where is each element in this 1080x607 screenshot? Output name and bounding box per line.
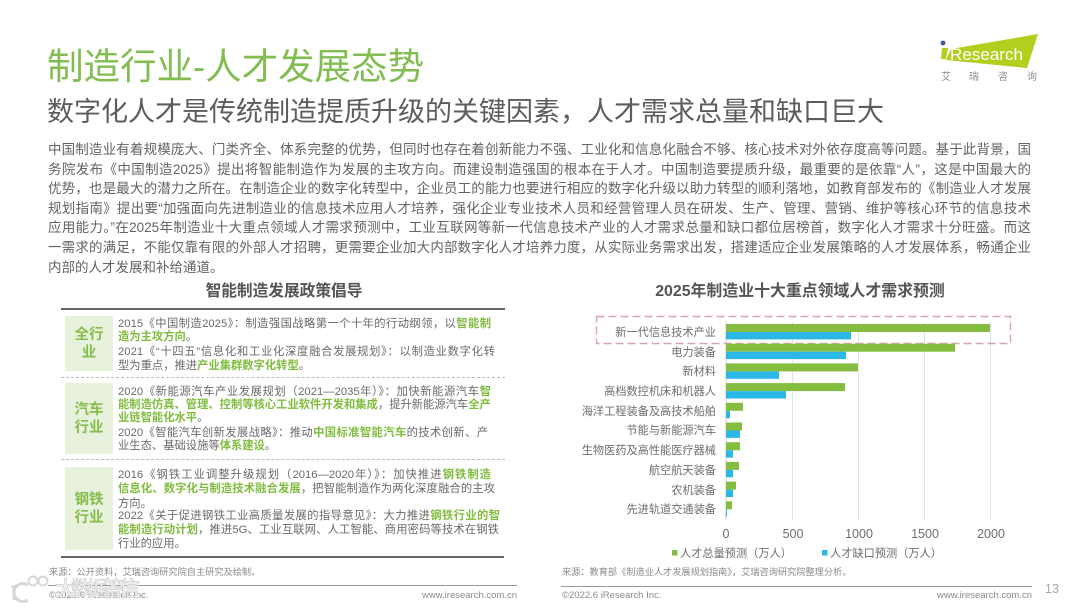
green bars: total demand (726, 324, 990, 509)
legend: 人才总量预测（万人） (680, 546, 792, 560)
icon: iResearch logo: 艾 (941, 71, 951, 83)
legend (672, 546, 942, 560)
category labels: 高档数控机床和机器人 (604, 384, 716, 398)
highlight box (596, 316, 1010, 344)
axis labels: 1500 (911, 527, 939, 541)
panel: 钢铁行业 policy (65, 467, 500, 550)
watermark: 大数据答信 (55, 578, 140, 601)
chart heading: 2025年制造业十大重点领域人才需求预测 (655, 283, 945, 300)
axis labels: 2000 (977, 527, 1005, 541)
body text block: 应用能力。”在2025年制造业十大重点领域人才需求预测中，工业互联网等新一代信息技术产业的人才需求总量和缺口都位居榜首，数字化人才需求十分旺盛。而这 (48, 220, 1031, 235)
category labels: 农机装备 (671, 483, 716, 497)
body text block: 中国制造业有着规模庞大、门类齐全、体系完整的优势，但同时也存在着创新能力不强、工业化和信息化融合不够、核心技术对外依存度高等问题。基于此背景，国 (48, 142, 1031, 157)
label: 汽车行业: 行业 (74, 420, 104, 436)
axis labels: 500 (783, 527, 803, 541)
panel: 汽车行业 policy: 业链智能化水平。 (118, 412, 208, 424)
body text block: 规划指南》提出要“加强面向先进制造业的信息技术应用人才培养，强化企业专业技术人员和经营管理人员在研发、生产、管理、营销、维护等核心环节的信息技术 (48, 201, 1031, 216)
footer: left url: www.iresearch.com.cn (422, 590, 517, 601)
blue bars: talent gap (726, 332, 851, 517)
source note: left: 来源：公开资料，艾瑞咨询研究院自主研究及绘制。 (49, 567, 260, 577)
bar chart (582, 316, 1012, 560)
panel: 钢铁行业 policy: 行业的应用。 (118, 538, 186, 550)
panel: 全行业 policy: 2021《“十四五”信息化和工业化深度融合发展规划》：以制造业数字化转 (118, 346, 495, 358)
source note: right: 来源：教育部《制造业人才发展规划指南》，艾瑞咨询研究院整理分析。 (562, 567, 851, 577)
panel: 汽车行业 policy: 2020《智能汽车创新发展战略》：推动中国标准智能汽车的技术创新、产 (118, 427, 488, 439)
icon: iResearch logo: 询 (1027, 70, 1037, 83)
category labels: 海洋工程装备及高技术船舶 (582, 404, 716, 418)
icon: iResearch logo: 瑞 (969, 71, 979, 83)
panel: 钢铁行业 policy: 能制造行动计划，推进5G、工业互联网、人工智能、商用密码等技术在钢铁 (118, 524, 499, 536)
panel: 钢铁行业 policy: 方向。 (118, 498, 152, 510)
page number: 13 (1045, 582, 1059, 596)
body text block: 一需求的满足，不能仅靠有限的外部人才招聘，更需要企业加大内部数字化人才培养力度，从实际业务需求出发，搭建适应企业发展策略的人才发展体系，畅通企业 (48, 240, 1031, 255)
category labels (582, 325, 716, 516)
label: 全行业: 业 (82, 344, 96, 360)
category labels: 新一代信息技术产业 (615, 325, 716, 339)
label: 汽车行业 (65, 383, 113, 454)
panel: 钢铁行业 policy: 2016《钢铁工业调整升级规划（2016—2020年）》：加快推进钢铁制造 (118, 469, 491, 481)
footer: right url: www.iresearch.com.cn (937, 590, 1032, 601)
category labels: 新材料 (682, 364, 716, 378)
label: 汽车行业: 汽车 (74, 402, 104, 418)
panel: 全行业 policy (65, 316, 495, 372)
legend: 人才缺口预测（万人） (830, 546, 942, 560)
footer: left copyright: ©2022.6 iResearch Inc. (49, 590, 148, 601)
label: 全行业: 全行 (74, 326, 104, 342)
label: 全行业 (65, 316, 113, 371)
title: 制造行业-人才发展态势 (47, 46, 424, 87)
label: 钢铁行业 (65, 467, 113, 550)
category labels: 节能与新能源汽车 (626, 423, 716, 437)
body text block: 优势，也是最大的潜力之所在。在制造企业的数字化转型中，企业员工的能力也要进行相应的数字化升级以助力转型的顺利落地，如教育部发布的《制造业人才发展 (48, 181, 1031, 196)
label: 钢铁行业: 行业 (74, 510, 104, 526)
icon: iResearch logo (940, 34, 1038, 83)
icon: iResearch logo: 咨 (998, 70, 1008, 83)
category labels: 电力装备 (671, 345, 716, 359)
panel: 全行业 policy: 2015《中国制造2025》：制造强国战略第一个十年的行动纲领，以智能制 (118, 318, 491, 330)
category labels: 航空航天装备 (649, 463, 716, 477)
panel: 全行业 policy: 型为重点，推进产业集群数字化转型。 (118, 360, 310, 372)
body text block (48, 142, 1031, 275)
category labels: 先进轨道交通装备 (626, 502, 716, 516)
subtitle: 数字化人才是传统制造提质升级的关键因素，人才需求总量和缺口巨大 (47, 97, 884, 127)
axis labels: 1000 (845, 527, 873, 541)
icon: iResearch logo: Research (950, 45, 1023, 64)
panel: 汽车行业 policy (65, 383, 491, 454)
body text block: 务院发布《中国制造2025》提出将智能制造作为发展的主攻方向。而建设制造强国的根本在于人才。中国制造要提质升级，最重要的是依靠“人”，这是中国最大的 (48, 162, 1031, 177)
label: 钢铁行业: 钢铁 (74, 492, 104, 508)
axis labels (723, 527, 1005, 541)
panel: 汽车行业 policy: 2020《新能源汽车产业发展规划（2021—2035年）》：加快新能源汽车智 (118, 386, 491, 398)
category labels: 生物医药及高性能医疗器械 (582, 443, 716, 457)
panel: 汽车行业 policy: 能制造仿真、管理、控制等核心工业软件开发和集成，提升新能源汽车全产 (118, 399, 491, 411)
axis labels: 0 (723, 527, 730, 541)
body text block: 内部的人才发展和补给通道。 (48, 260, 224, 275)
panel: 钢铁行业 policy: 信息化、数字化与制造技术融合发展，把智能制造作为两化深度融合的主攻 (118, 483, 495, 495)
panel: 钢铁行业 policy: 2022《关于促进钢铁工业高质量发展的指导意见》：大力推进钢铁行业的智 (118, 510, 500, 522)
panel: 汽车行业 policy: 业生态、基础设施等体系建设。 (118, 440, 276, 452)
watermark (11, 576, 140, 603)
panel heading: policy: 智能制造发展政策倡导 (206, 283, 362, 300)
footer: right copyright: ©2022.6 iResearch Inc. (562, 590, 661, 601)
panel: 全行业 policy: 造为主攻方向。 (118, 331, 197, 343)
